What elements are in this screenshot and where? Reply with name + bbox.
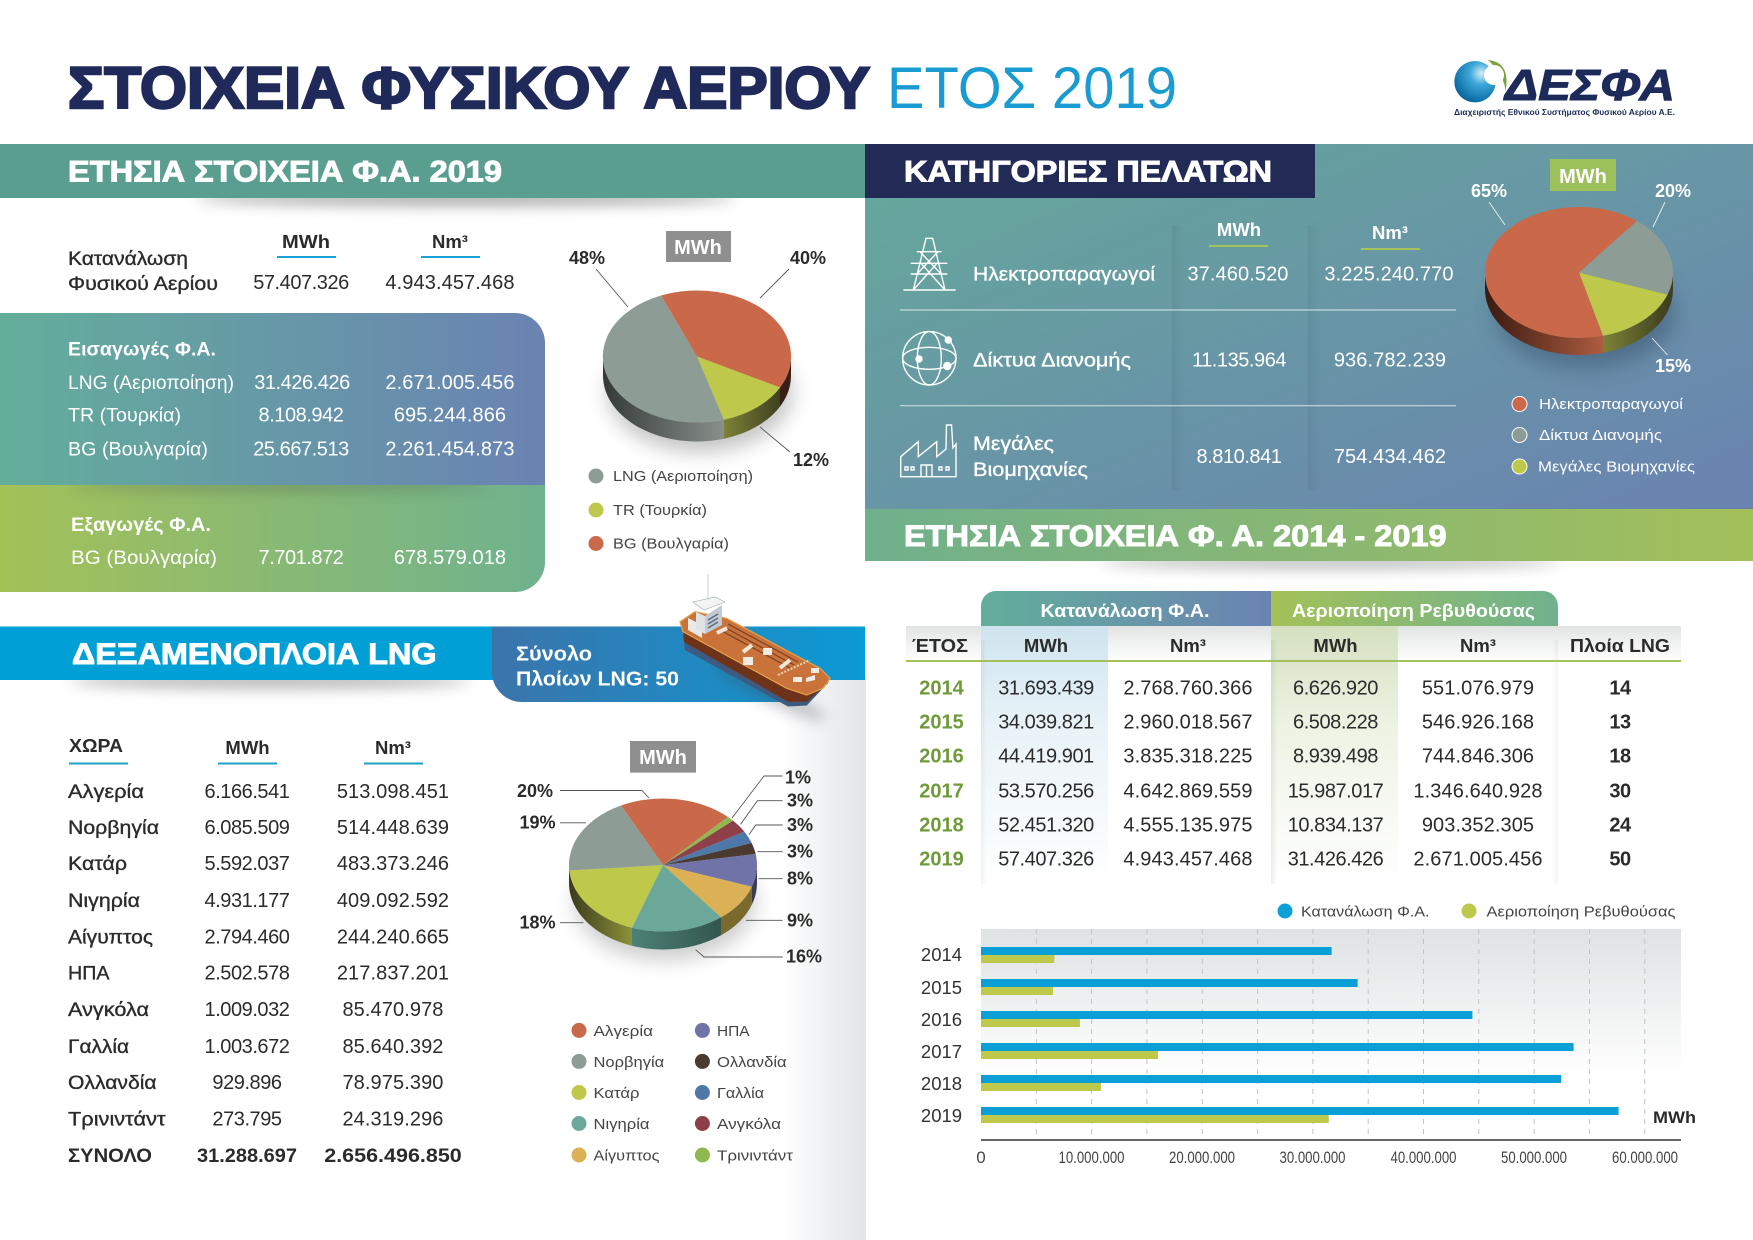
row 2019: 2.671.005.456 — [1413, 848, 1543, 870]
pie chart: gas supply by source — [569, 248, 829, 470]
year axis labels: 2019 — [921, 1105, 962, 1126]
pie labels right: 16% — [786, 946, 822, 966]
row France — [68, 1036, 444, 1058]
year axis labels: 2017 — [921, 1041, 962, 1062]
legend: customers pie: Ηλεκτροπαραγωγοί — [1539, 396, 1684, 413]
row 2014: 14 — [1609, 678, 1632, 700]
legend: LNG by country pie: Ανγκόλα — [717, 1116, 781, 1133]
row total: ΣΥΝΟΛΟ — [68, 1146, 152, 1167]
row Egypt: Αίγυπτος — [68, 928, 153, 948]
panel: exports: 7.701.872 — [259, 547, 344, 569]
legend: LNG by country pie: ΗΠΑ — [717, 1023, 750, 1040]
row 2015: 2015 — [919, 712, 964, 734]
row France: 85.640.392 — [342, 1036, 444, 1058]
row Nigeria: 4.931.177 — [205, 890, 290, 912]
row 2018: 4.555.135.975 — [1123, 814, 1253, 836]
legend: customers pie: Δίκτυα Διανομής — [1539, 427, 1662, 444]
panel: exports: 678.579.018 — [394, 547, 506, 569]
row Qatar: Κατάρ — [68, 854, 127, 875]
panel: annual data 2019 header band — [0, 144, 865, 198]
pie label 40%: 40% — [790, 248, 826, 268]
table column headers: MWh — [1313, 635, 1358, 656]
panel: imports — [0, 313, 545, 485]
heading: annual data: ΕΤΗΣΙΑ ΣΤΟΙΧΕΙΑ Φ.Α. 2019 — [68, 156, 502, 188]
band shadows — [195, 190, 735, 206]
year axis labels: 2018 — [921, 1073, 962, 1094]
table: natural gas consumption: MWh — [282, 231, 330, 252]
row Algeria — [68, 781, 449, 803]
row 2015: 34.039.821 — [998, 712, 1094, 734]
row Netherlands: Ολλανδία — [68, 1073, 157, 1094]
legend: gas supply pie: LNG (Αεριοποίηση) — [613, 468, 753, 485]
row 2019: 50 — [1609, 848, 1631, 870]
heading band: LNG tankers: ΔΕΞΑΜΕΝΟΠΛΟΙΑ LNG — [72, 638, 436, 671]
panel: imports: TR (Τουρκία) — [68, 406, 181, 426]
title — [68, 56, 1177, 121]
heading band: LNG tankers — [0, 626, 865, 680]
table: natural gas consumption: 4.943.457.468 — [385, 272, 515, 294]
row USA: 217.837.201 — [337, 962, 449, 984]
title bold part: ΣΤΟΙΧΕΙΑ ΦΥΣΙΚΟΥ ΑΕΡΙΟΥ — [68, 56, 870, 121]
legend: customers pie — [1512, 396, 1695, 476]
pie labels left: 18% — [519, 912, 556, 932]
callout: total LNG ships: Σύνολο — [516, 643, 592, 665]
row USA: 2.502.578 — [205, 962, 290, 984]
row 2016: 18 — [1609, 745, 1631, 767]
panel: imports: LNG (Αεριοποίηση) — [68, 373, 234, 394]
row Netherlands: 929.896 — [212, 1072, 282, 1094]
row: large industries: Μεγάλες — [973, 434, 1054, 455]
row Egypt: 244.240.665 — [337, 926, 449, 948]
legend: LNG by country pie: Τρινιντάντ — [717, 1148, 793, 1164]
row 2017: 1.346.640.928 — [1413, 781, 1543, 803]
imports heading: Εισαγωγές Φ.Α. — [68, 340, 216, 360]
row Nigeria: 409.092.592 — [337, 890, 449, 912]
pie chart: customers — [1471, 181, 1691, 376]
table: natural gas consumption: Κατανάλωση — [68, 249, 188, 270]
panel: exports: BG (Βουλγαρία) — [71, 548, 217, 569]
table: natural gas consumption: Nm³ — [432, 231, 468, 252]
row 2016: 744.846.306 — [1422, 745, 1534, 767]
panel: imports: 25.667.513 — [253, 438, 349, 460]
table: LNG tankers by country — [68, 735, 462, 1167]
row Nigeria: Νιγηρία — [68, 891, 140, 912]
row 2018: 52.451.320 — [998, 814, 1094, 836]
legend: LNG by country pie — [572, 1023, 793, 1164]
year axis labels: 2014 — [921, 944, 962, 965]
table: LNG tankers by country: ΧΩΡΑ — [69, 735, 123, 756]
pie label 15%: 15% — [1655, 356, 1691, 376]
unit tag MWh — [666, 231, 731, 262]
row: distribution networks: Δίκτυα Διανομής — [973, 350, 1131, 372]
row: large industries: 8.810.841 — [1197, 446, 1282, 468]
row 2018 — [919, 814, 1632, 836]
row 2017: 53.570.256 — [998, 781, 1094, 803]
panel: imports: 2.261.454.873 — [385, 438, 515, 460]
row Qatar — [68, 853, 449, 875]
legend: gas supply pie: TR (Τουρκία) — [613, 502, 707, 519]
row Egypt — [68, 926, 449, 948]
row Trinidad: Τρινιντάντ — [68, 1110, 166, 1130]
year axis labels: 2016 — [921, 1009, 962, 1030]
legend: LNG by country pie: Νορβηγία — [594, 1054, 665, 1071]
table: yearly data 2014-2019 — [906, 591, 1681, 884]
row 2016 — [919, 745, 1631, 767]
unit label MWh: MWh — [1653, 1108, 1696, 1127]
row 2014: 6.626.920 — [1293, 678, 1378, 700]
heading band: annual data 2014-2019 — [865, 509, 1753, 561]
panel: customer categories: 3.225.240.770 — [1324, 264, 1454, 286]
legend: LNG by country pie: Κατάρ — [594, 1085, 640, 1102]
row 2017 — [919, 781, 1631, 803]
row Angola: Ανγκόλα — [68, 1000, 149, 1021]
row 2019 — [919, 848, 1631, 870]
value axis labels: 20.000.000 — [1169, 1148, 1235, 1167]
customer categories heading: ΚΑΤΗΓΟΡΙΕΣ ΠΕΛΑΤΩΝ — [904, 156, 1272, 188]
pie labels right: 8% — [787, 868, 813, 888]
row 2018: 24 — [1609, 814, 1632, 836]
row 2016: 8.939.498 — [1293, 745, 1378, 767]
row 2017: 4.642.869.559 — [1123, 781, 1253, 803]
row Trinidad: 24.319.296 — [342, 1108, 444, 1130]
panel: exports — [0, 481, 545, 592]
row Algeria: 6.166.541 — [205, 781, 290, 803]
row 2018: 2018 — [919, 814, 964, 836]
panel: imports: 8.108.942 — [259, 404, 344, 426]
icon: LNG tanker ship — [680, 574, 830, 728]
panel: imports: 31.426.426 — [254, 372, 350, 394]
row Egypt: 2.794.460 — [205, 926, 290, 948]
row France: Γαλλία — [68, 1037, 129, 1058]
table column headers — [912, 635, 1670, 656]
row France: 1.003.672 — [205, 1036, 290, 1058]
row Angola: 1.009.032 — [205, 999, 290, 1021]
unit tag MWh: MWh — [1559, 166, 1607, 188]
table: natural gas consumption: Φυσικού Αερίου — [68, 274, 218, 295]
row 2017: 2017 — [919, 781, 964, 803]
table group header: consumption — [981, 591, 1271, 626]
row 2015: 546.926.168 — [1422, 712, 1534, 734]
pie labels right: 3% — [787, 842, 813, 862]
row Netherlands — [68, 1072, 444, 1094]
column header Nm3: Nm³ — [1372, 222, 1408, 243]
left-side pale edge background — [780, 678, 866, 1240]
row 2017: 30 — [1609, 781, 1631, 803]
legend: gas supply pie: BG (Βουλγαρία) — [613, 536, 729, 552]
row total: 31.288.697 — [197, 1146, 297, 1167]
year axis labels — [921, 944, 962, 1126]
row 2014: 2.768.760.366 — [1123, 678, 1253, 700]
row 2016: 44.419.901 — [998, 745, 1094, 767]
icon: power pylon — [903, 238, 956, 290]
year axis labels: 2015 — [921, 977, 962, 998]
unit tag MWh — [630, 741, 696, 773]
row Angola — [68, 999, 444, 1021]
row Norway: Νορβηγία — [68, 818, 159, 839]
row Norway: 6.085.509 — [205, 817, 290, 839]
table column headers: Πλοία LNG — [1570, 635, 1670, 656]
row Netherlands: 78.975.390 — [342, 1072, 444, 1094]
row Trinidad — [68, 1108, 444, 1130]
table: natural gas consumption: 57.407.326 — [253, 272, 349, 294]
callout: total LNG ships: Πλοίων LNG: 50 — [516, 669, 679, 691]
value axis labels: 60.000.000 — [1612, 1148, 1678, 1167]
row Trinidad: 273.795 — [212, 1108, 282, 1130]
row 2015: 2.960.018.567 — [1123, 712, 1253, 734]
row 2019: 2019 — [919, 848, 964, 870]
row USA: ΗΠΑ — [68, 964, 110, 984]
pie labels left: 19% — [519, 812, 556, 832]
panel: imports: BG (Βουλγαρία) — [68, 440, 208, 460]
row Algeria: 513.098.451 — [337, 781, 449, 803]
row: large industries: 754.434.462 — [1334, 446, 1446, 468]
row 2019: 31.426.426 — [1288, 848, 1384, 870]
callout: total LNG ships — [492, 626, 865, 702]
row 2015 — [919, 712, 1631, 734]
pie labels right: 9% — [787, 910, 813, 930]
panel: customer categories: 936.782.239 — [1334, 350, 1446, 372]
table column headers: ΈΤΟΣ — [912, 635, 968, 656]
title year part: ΕΤΟΣ 2019 — [887, 56, 1177, 121]
table group header: regasification: Αεριοποίηση Ρεβυθούσας — [1292, 601, 1535, 621]
pie labels right — [785, 768, 822, 966]
table group header: regasification — [1271, 591, 1558, 626]
unit tag MWh: MWh — [674, 237, 722, 259]
legend: LNG by country pie: Αίγυπτος — [594, 1148, 660, 1164]
pie labels left — [517, 781, 556, 932]
panel: customer categories: 11.135.964 — [1192, 350, 1286, 372]
row 2018: 903.352.305 — [1422, 814, 1534, 836]
row 2017: 15.987.017 — [1288, 781, 1384, 803]
table: natural gas consumption — [68, 231, 515, 295]
legend: bar chart — [1278, 904, 1676, 920]
row Angola: 85.470.978 — [342, 999, 444, 1021]
legend: LNG by country pie: Νιγηρία — [594, 1116, 650, 1133]
row: power producers: Ηλεκτροπαραγωγοί — [973, 264, 1156, 286]
row Nigeria — [68, 890, 449, 912]
customer categories heading — [865, 144, 1315, 198]
table column headers: Nm³ — [1170, 635, 1206, 656]
value axis labels — [976, 1148, 1678, 1167]
pie labels right: 3% — [787, 790, 813, 810]
row 2014 — [919, 678, 1632, 700]
bar chart: MWh 2014-2019 — [921, 929, 1696, 1167]
pie labels left: 20% — [517, 781, 553, 801]
row Norway: 514.448.639 — [337, 817, 449, 839]
table group header: consumption: Κατανάλωση Φ.Α. — [1040, 601, 1210, 621]
row 2014: 551.076.979 — [1422, 678, 1534, 700]
row 2014: 31.693.439 — [998, 678, 1094, 700]
logo: ΔΕΣΦΑ: Διαχειριστής Εθνικού Συστήματος Φυσικού Αερίου Α.Ε. — [1454, 107, 1675, 117]
row Norway — [68, 817, 449, 839]
row Qatar: 5.592.037 — [205, 853, 290, 875]
panel: imports: 695.244.866 — [394, 404, 506, 426]
unit tag MWh: MWh — [639, 747, 687, 769]
row 2018: 10.834.137 — [1288, 814, 1384, 836]
row 2014: 2014 — [919, 678, 965, 700]
value axis labels: 0 — [976, 1148, 986, 1167]
table column headers: MWh — [1024, 635, 1068, 656]
icon: factory — [901, 425, 956, 477]
value axis labels: 30.000.000 — [1280, 1148, 1346, 1167]
row Algeria: Αλγερία — [68, 782, 144, 803]
panel: imports: 2.671.005.456 — [385, 372, 515, 394]
legend: LNG by country pie: Αλγερία — [594, 1023, 653, 1040]
legend: gas supply pie — [588, 468, 753, 552]
value axis labels: 50.000.000 — [1501, 1148, 1567, 1167]
row total: 2.656.496.850 — [324, 1146, 462, 1167]
panel: customer categories: 37.460.520 — [1187, 264, 1289, 286]
table column headers: Nm³ — [1460, 635, 1496, 656]
column header MWh: MWh — [1217, 219, 1261, 240]
pie chart: LNG by country — [517, 768, 822, 966]
row 2016: 2016 — [919, 745, 964, 767]
legend: customers pie: Μεγάλες Βιομηχανίες — [1538, 458, 1695, 476]
row: large industries: Βιομηχανίες — [973, 460, 1088, 481]
icon: globe network — [903, 332, 956, 385]
legend: LNG by country pie: Γαλλία — [717, 1085, 764, 1102]
value axis labels: 40.000.000 — [1390, 1148, 1456, 1167]
pie labels right: 1% — [785, 768, 811, 788]
value axis labels: 10.000.000 — [1058, 1148, 1124, 1167]
heading band: annual data 2014-2019: ΕΤΗΣΙΑ ΣΤΟΙΧΕΙΑ Φ. Α. 2014 - 2019 — [904, 520, 1447, 553]
unit tag MWh — [1550, 159, 1616, 191]
logo: ΔΕΣΦΑ: ΔΕΣΦΑ — [1503, 61, 1675, 110]
row 2016: 3.835.318.225 — [1123, 745, 1253, 767]
panel: customer categories — [865, 144, 1753, 509]
table: LNG tankers by country: Nm³ — [375, 737, 411, 758]
pie label 48%: 48% — [569, 248, 605, 268]
legend: bar chart: Κατανάλωση Φ.Α. — [1301, 904, 1430, 920]
row USA — [68, 962, 449, 984]
pie labels right: 3% — [787, 815, 813, 835]
legend: LNG by country pie: Ολλανδία — [717, 1054, 787, 1071]
row 2015: 6.508.228 — [1293, 712, 1378, 734]
row 2015: 13 — [1609, 712, 1631, 734]
row Qatar: 483.373.246 — [337, 853, 449, 875]
row total — [68, 1146, 462, 1167]
row 2019: 57.407.326 — [998, 848, 1094, 870]
row: large industries — [973, 434, 1446, 481]
exports heading: Εξαγωγές Φ.Α. — [71, 515, 211, 536]
pie label 65%: 65% — [1471, 181, 1507, 201]
logo: ΔΕΣΦΑ — [1454, 60, 1675, 117]
legend: bar chart: Αεριοποίηση Ρεβυθούσας — [1486, 904, 1676, 920]
pie label 12%: 12% — [793, 450, 829, 470]
row 2019: 4.943.457.468 — [1123, 848, 1253, 870]
table: LNG tankers by country: MWh — [225, 737, 270, 758]
pie label 20%: 20% — [1655, 181, 1691, 201]
